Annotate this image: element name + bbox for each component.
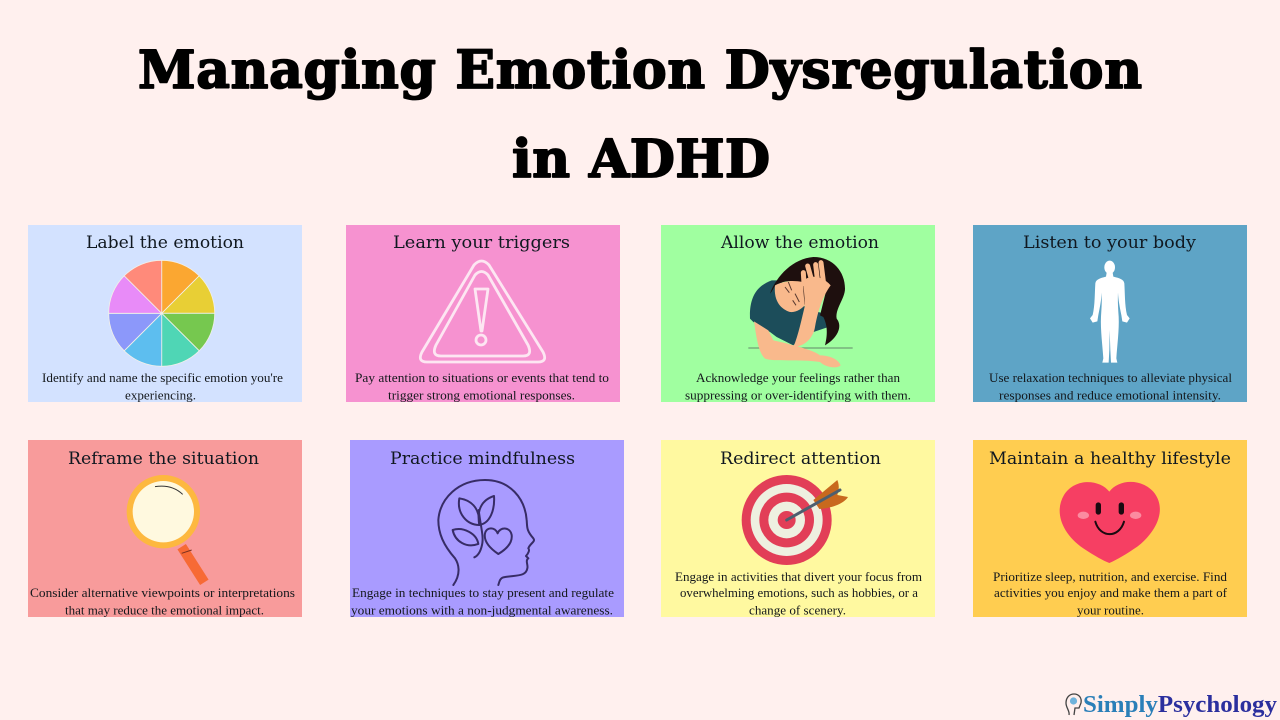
text: redirect attention description — [675, 570, 922, 618]
title — [138, 40, 1142, 190]
icon: head with leaves and heart — [438, 480, 534, 585]
panel: listen to your body — [973, 225, 1247, 402]
panel: practice mindfulness — [350, 440, 624, 618]
heading: maintain a healthy lifestyle: Maintain a healthy lifestyle — [989, 449, 1231, 468]
panel: label the emotion — [28, 225, 302, 402]
text: maintain a healthy lifestyle description: activities you enjoy and make them a part of — [994, 586, 1228, 600]
text: reframe the situation description: Consider alternative viewpoints or interpretations — [30, 586, 295, 600]
heading: allow the emotion: Allow the emotion — [720, 233, 879, 252]
panel: maintain a healthy lifestyle — [973, 440, 1247, 618]
text: learn your triggers description: trigger strong emotional responses. — [388, 388, 575, 402]
text: allow the emotion description: Acknowledge your feelings rather than — [696, 371, 901, 385]
icon: magnifying glass — [127, 475, 204, 582]
text: practice mindfulness description: Engage in techniques to stay present and regulate — [352, 586, 614, 600]
text: maintain a healthy lifestyle description: your routine. — [1077, 604, 1144, 618]
panel: allow the emotion — [661, 225, 935, 402]
text: reframe the situation description — [30, 586, 295, 618]
icon: human body silhouette — [1090, 261, 1130, 363]
heading: redirect attention: Redirect attention — [720, 449, 881, 468]
text: learn your triggers description: Pay attention to situations or events that tend to — [355, 371, 609, 385]
title: in ADHD — [512, 129, 770, 190]
text: redirect attention description: Engage in activities that divert your focus from — [675, 570, 922, 584]
text: label the emotion description — [42, 371, 283, 402]
text: allow the emotion description — [685, 371, 911, 402]
text: learn your triggers description — [355, 371, 609, 402]
panel: learn your triggers — [346, 225, 620, 402]
text: reframe the situation description: that may reduce the emotional impact. — [65, 604, 264, 618]
icon: emotion wheel — [109, 260, 215, 366]
text: listen to your body description: responses and reduce emotional intensity. — [999, 388, 1221, 402]
icon: distressed woman resting head on hand — [748, 257, 853, 367]
heading: listen to your body: Listen to your body — [1023, 233, 1197, 252]
text: redirect attention description: overwhelming emotions, such as hobbies, or a — [680, 586, 918, 600]
icon: target with arrow — [742, 475, 848, 565]
wordmark: SimplyPsychology — [1083, 692, 1277, 718]
text: maintain a healthy lifestyle description: Prioritize sleep, nutrition, and exercise. Find — [993, 570, 1228, 584]
heading: practice mindfulness: Practice mindfulness — [390, 449, 575, 468]
title: Managing Emotion Dysregulation — [138, 40, 1142, 101]
text: listen to your body description — [989, 371, 1233, 402]
text: listen to your body description: Use relaxation techniques to alleviate physical — [989, 371, 1233, 385]
text: practice mindfulness description — [351, 586, 614, 618]
text: redirect attention description: change of scenery. — [749, 604, 846, 618]
panel: reframe the situation — [28, 440, 302, 618]
heading: reframe the situation: Reframe the situation — [68, 449, 259, 468]
text: label the emotion description: Identify and name the specific emotion you're — [42, 371, 283, 385]
icon: warning triangle — [420, 261, 545, 362]
heading: learn your triggers: Learn your triggers — [393, 233, 570, 252]
text: label the emotion description: experiencing. — [125, 388, 196, 402]
logo: Simply Psychology — [1066, 692, 1277, 718]
panel: redirect attention — [661, 440, 935, 618]
icon: head with lightbulb — [1066, 694, 1081, 715]
text: maintain a healthy lifestyle description — [993, 570, 1228, 618]
text: allow the emotion description: suppressing or over-identifying with them. — [685, 388, 911, 402]
heading: label the emotion: Label the emotion — [86, 233, 244, 252]
text: practice mindfulness description: your emotions with a non-judgmental awareness. — [351, 604, 613, 618]
icon: smiling heart — [1060, 482, 1160, 563]
